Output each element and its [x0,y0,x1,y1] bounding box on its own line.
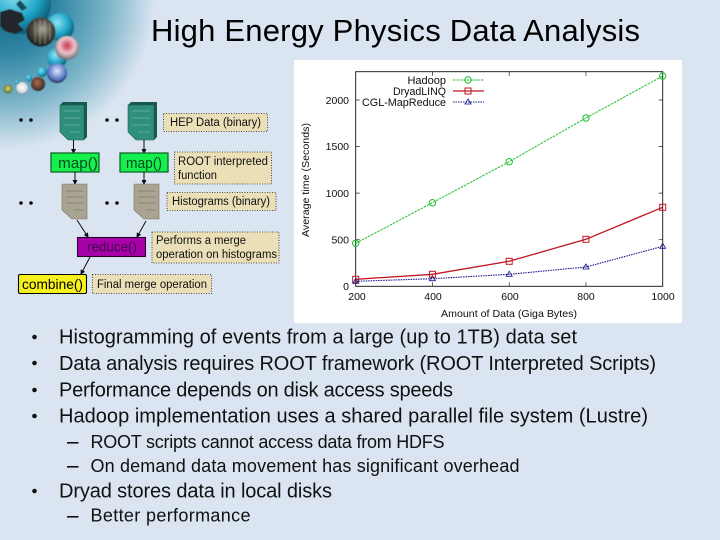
x axis labels: 800 [577,291,595,303]
axis ticks [356,72,663,286]
reduce box: reduce() [87,238,137,254]
icon: green data document 1 [60,102,87,140]
series: DryadLINQ [353,204,666,282]
y axis labels: 1000 [326,188,349,200]
diagram: HEP MapReduce workflow [18,102,279,294]
arrow: map to histogram 1 [74,172,76,184]
icon: ellipsis dots lower middle [105,201,119,205]
y axis title: Average time (Seconds) [300,123,312,237]
note: Final merge operation [92,274,212,294]
legend [362,75,484,109]
y axis labels [326,95,349,293]
bullet: Dryad local disks: Dryad stores data in local disks [59,480,332,502]
y axis labels: 0 [343,281,349,293]
y axis labels: 500 [331,234,349,246]
legend: Hadoop [407,75,446,87]
x axis labels: 200 [348,291,366,303]
icon: green data document 2 [128,102,157,140]
bullet: disk access: Performance depends on disk access speeds [59,380,453,402]
bullet: ROOT framework: Data analysis requires ROOT framework (ROOT Interpreted Scripts) [59,353,656,375]
x axis labels: 400 [424,291,442,303]
note: ROOT interpreted function: function [178,170,217,182]
note: merge operation on histograms [152,232,279,263]
corner decoration: teal glow with globes [0,0,155,150]
map box 1: map() [58,155,98,172]
note: ROOT interpreted function [174,152,272,184]
note: merge operation on histograms: Performs a merge [156,235,246,247]
x axis labels: 600 [501,291,519,303]
series: Hadoop [352,73,666,246]
note: HEP Data (binary): HEP Data (binary) [170,117,261,129]
map box 2: map() [126,155,162,172]
bullet list [32,326,656,526]
series: CGL-MapReduce [353,243,666,283]
note: Histograms (binary): Histograms (binary) [172,196,270,208]
y axis labels: 2000 [326,95,349,107]
arrow: map to histogram 2 [143,172,145,184]
icon: gray histogram document 2 [134,184,159,219]
icon: ellipsis dots top left [19,118,33,122]
note: Histograms (binary) [167,192,276,210]
arrow: histogram 1 to reduce [77,220,88,237]
note: HEP Data (binary) [164,114,268,132]
combine box: combine() [22,276,83,292]
arrow: data to map 2 [143,140,145,153]
icon: ellipsis dots lower left [19,201,33,205]
icon: gray histogram document 1 [62,184,87,219]
title: High Energy Physics Data Analysis [151,13,640,48]
bullet: Hadoop implementation: Hadoop implementation uses a shared parallel file system (Lustre) [59,406,648,428]
arrow: reduce to combine [81,257,90,274]
note: ROOT interpreted function: ROOT interpreted [178,156,268,168]
note: Final merge operation: Final merge operation [97,279,207,291]
bullet: histogramming: Histogramming of events from a large (up to 1TB) data set [59,326,577,348]
legend: DryadLINQ [393,86,446,98]
x axis labels: 1000 [651,291,675,303]
x axis labels [348,291,675,303]
arrow: histogram 2 to reduce [137,221,146,237]
plot frame [356,72,663,286]
sub-bullet: better performance: Better performance [90,506,250,526]
arrow: data to map 1 [72,140,74,153]
x axis title: Amount of Data (Giga Bytes) [441,308,577,320]
reduce box [78,238,146,256]
note: merge operation on histograms: operation on histograms [156,249,277,261]
legend: CGL-MapReduce [362,97,446,109]
line chart: average time vs data size [294,60,682,323]
icon: ellipsis dots top middle [105,118,119,122]
y axis labels: 1500 [326,141,349,153]
sub-bullet: data movement overhead: On demand data movement has significant overhead [90,456,520,476]
sub-bullet: HDFS: ROOT scripts cannot access data from HDFS [90,432,444,452]
